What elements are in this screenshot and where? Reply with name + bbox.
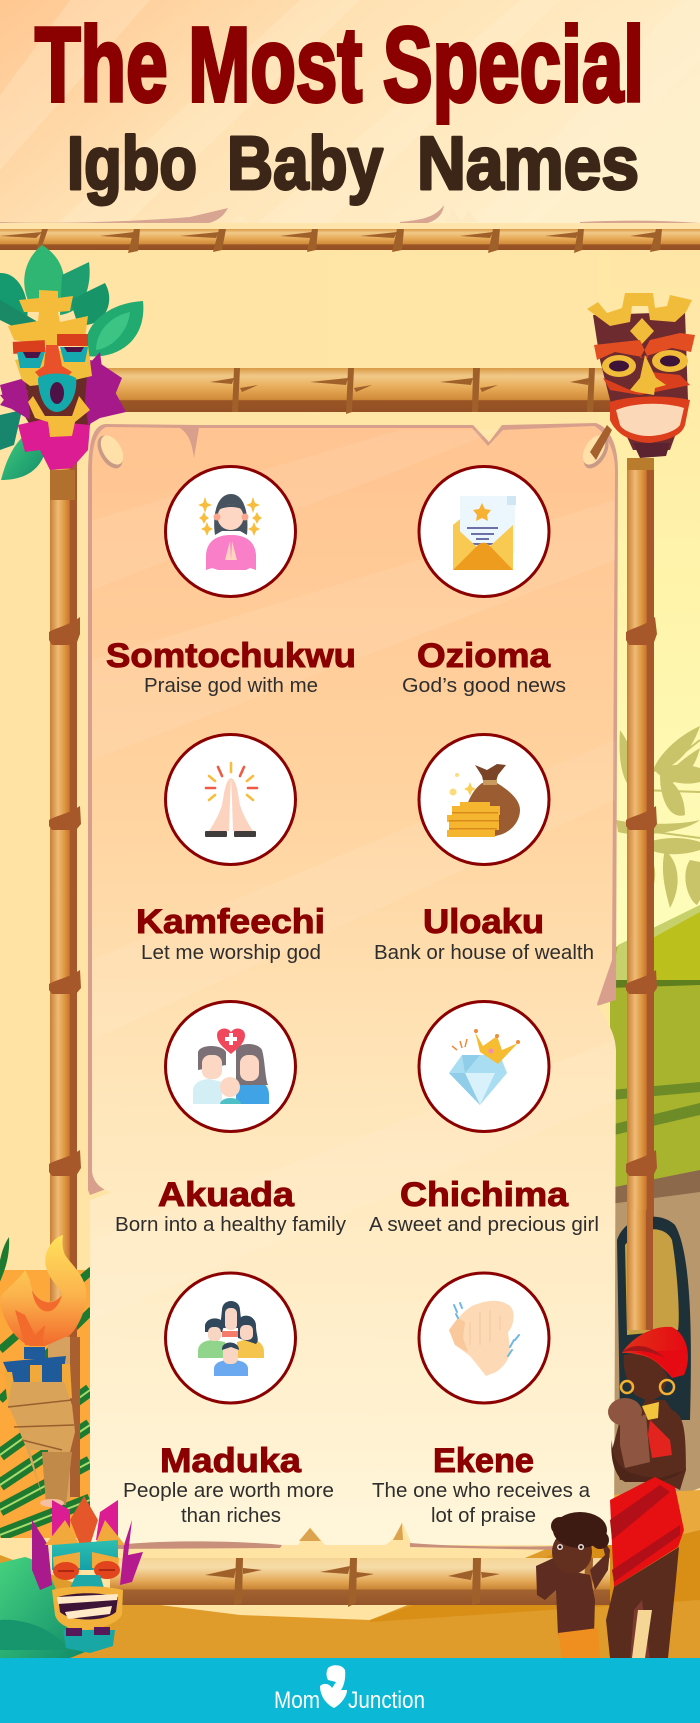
second horizontal bamboo bbox=[95, 368, 615, 414]
panel: paper background bbox=[88, 423, 618, 1550]
icon: praying hands bbox=[166, 734, 296, 864]
name: Chichima bbox=[400, 1176, 569, 1214]
subtitle: Names bbox=[417, 121, 639, 205]
right vertical bamboo bbox=[626, 460, 657, 1340]
top horizontal bamboo bbox=[0, 229, 700, 253]
icon: group of people bbox=[166, 1273, 296, 1403]
item: Akuada bbox=[115, 1002, 346, 1236]
name: Ozioma bbox=[417, 637, 551, 675]
meaning: The one who receives a bbox=[372, 1480, 591, 1502]
mask: top left with leaves bbox=[0, 245, 143, 500]
torch bbox=[0, 1235, 86, 1507]
name: Uloaku bbox=[423, 903, 544, 941]
icon: envelope with letter bbox=[419, 466, 549, 596]
meaning: Praise god with me bbox=[144, 675, 318, 697]
item: Maduka bbox=[123, 1273, 334, 1527]
background: right landscape with hills and palm bbox=[608, 250, 700, 1540]
background: palm fronds lower left bbox=[0, 1237, 92, 1535]
meaning: Born into a healthy family bbox=[115, 1214, 346, 1236]
illustration: child bbox=[536, 1512, 610, 1658]
logo wordmark bbox=[274, 1687, 425, 1714]
left vertical bamboo bbox=[49, 460, 81, 1360]
footer band bbox=[0, 1658, 700, 1723]
mask: bottom left with leaf bbox=[0, 1496, 143, 1660]
meaning bbox=[372, 1480, 591, 1527]
item: Ekene bbox=[372, 1273, 591, 1527]
item: Uloaku bbox=[374, 734, 594, 964]
icon: praying woman bbox=[166, 466, 296, 596]
bottom horizontal bamboo bbox=[110, 1558, 610, 1607]
icon: healthy family bbox=[166, 1002, 296, 1132]
meaning: Let me worship god bbox=[141, 942, 321, 964]
logo wordmark: Junction bbox=[348, 1687, 425, 1714]
mask: top right bbox=[587, 293, 695, 470]
icon: clapping hands bbox=[419, 1273, 549, 1403]
name: Maduka bbox=[160, 1442, 302, 1480]
meaning: lot of praise bbox=[431, 1505, 536, 1527]
subtitle: Baby bbox=[227, 121, 383, 205]
item: Ozioma bbox=[402, 466, 566, 697]
meaning: God’s good news bbox=[402, 675, 566, 697]
item: Kamfeechi bbox=[136, 734, 325, 964]
icon: money bag with coins bbox=[419, 734, 549, 864]
name: Kamfeechi bbox=[136, 903, 325, 941]
subtitle bbox=[67, 121, 639, 205]
meaning: A sweet and precious girl bbox=[369, 1214, 599, 1236]
meaning bbox=[123, 1480, 334, 1527]
background: left orange wall bbox=[0, 1270, 92, 1545]
name: Akuada bbox=[158, 1176, 295, 1214]
item: Somtochukwu bbox=[106, 466, 356, 697]
name: Somtochukwu bbox=[106, 637, 356, 675]
name: Ekene bbox=[433, 1442, 534, 1480]
logo: MomJunction bbox=[274, 1665, 425, 1714]
icon: diamond with crown bbox=[419, 1002, 549, 1132]
logo wordmark: Mom bbox=[274, 1687, 320, 1714]
subtitle: Igbo bbox=[67, 121, 197, 205]
top torn paper edge bbox=[0, 205, 700, 233]
meaning: People are worth more bbox=[123, 1480, 334, 1502]
item: Chichima bbox=[369, 1002, 599, 1236]
logo mark: mother and child bbox=[320, 1665, 347, 1708]
meaning: than riches bbox=[181, 1505, 281, 1527]
background: desert sand bbox=[0, 1488, 700, 1658]
illustration: mother holding baby bbox=[606, 1210, 691, 1660]
meaning: Bank or house of wealth bbox=[374, 942, 594, 964]
